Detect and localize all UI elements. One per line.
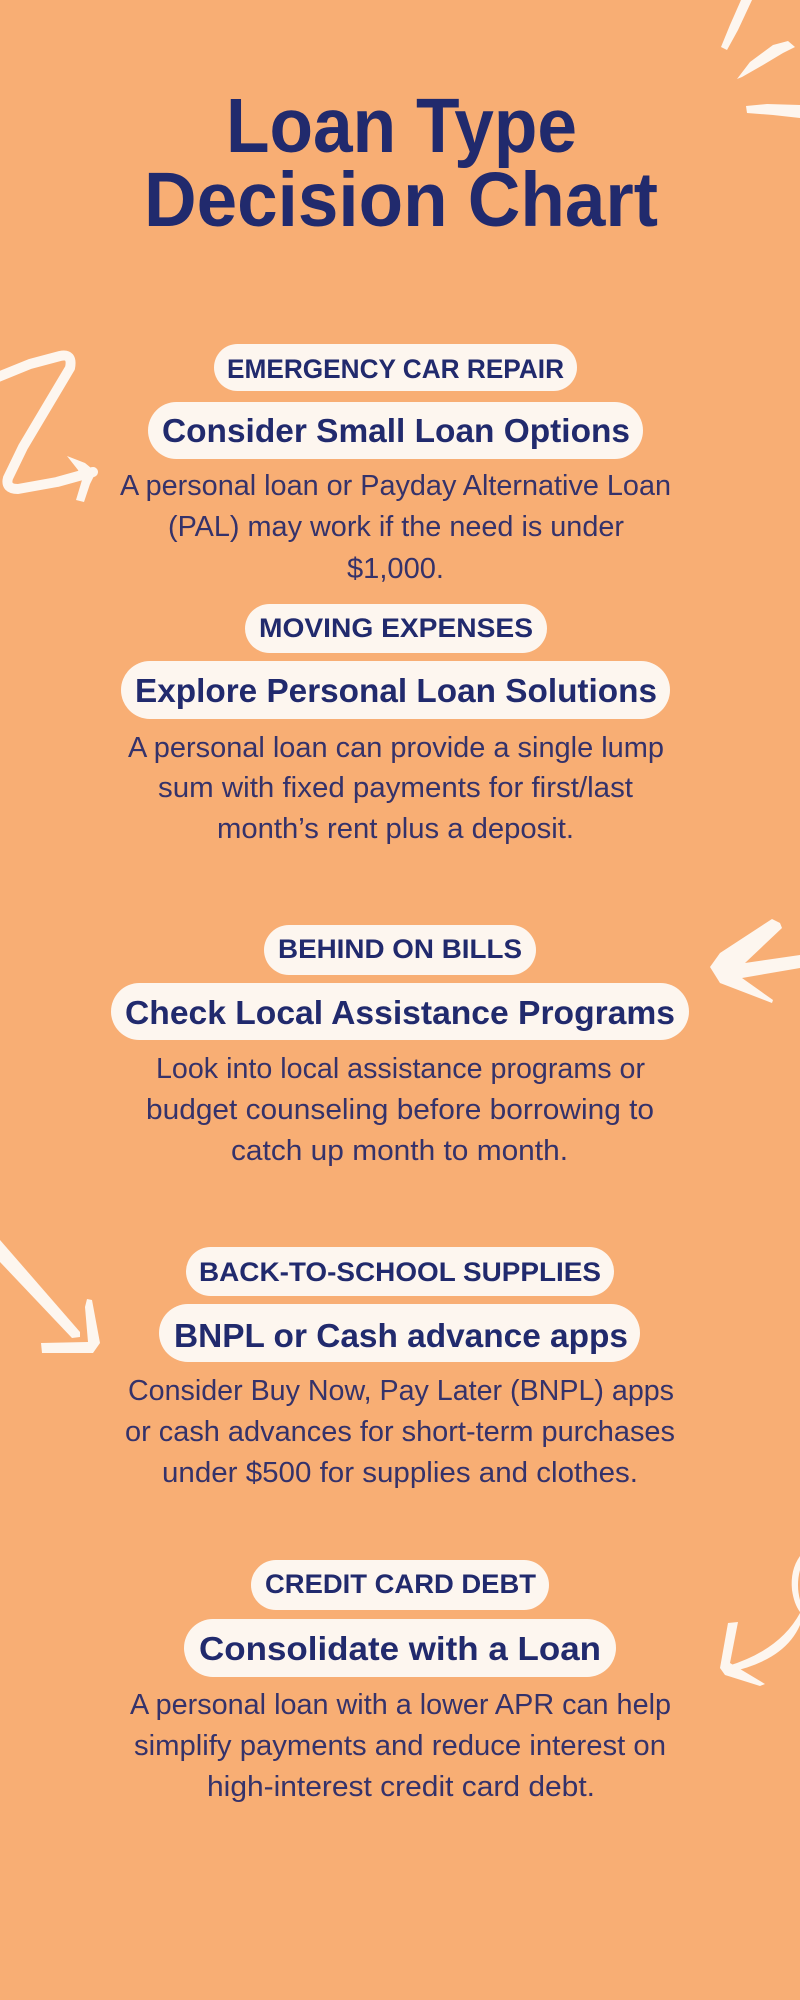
description [120, 470, 671, 585]
panel: emergency car repair [120, 344, 671, 585]
heading pill: BNPL or Cash advance apps [174, 1317, 628, 1354]
heading pill: Explore Personal Loan Solutions [135, 672, 657, 709]
description: sum with fixed payments for first/last [158, 772, 633, 804]
heading pill [148, 402, 643, 459]
description: A personal loan can provide a single lump [128, 732, 664, 764]
panel: moving expenses [121, 604, 670, 845]
heading pill: Consolidate with a Loan [199, 1630, 601, 1667]
label pill [186, 1247, 614, 1296]
heading pill [121, 661, 670, 719]
panel: back-to-school supplies [125, 1247, 675, 1489]
description: high-interest credit card debt. [207, 1771, 595, 1803]
heading pill [111, 983, 689, 1040]
description: (PAL) may work if the need is under [168, 511, 624, 543]
title: Loan Type [226, 83, 577, 169]
decorative burst strokes [721, 0, 800, 118]
title [144, 83, 658, 243]
heading pill [184, 1619, 616, 1677]
description: $1,000. [347, 553, 444, 585]
description: Look into local assistance programs or [156, 1053, 645, 1085]
description [128, 732, 664, 845]
label pill: CREDIT CARD DEBT [265, 1569, 537, 1599]
description: A personal loan with a lower APR can help [130, 1689, 671, 1721]
description: catch up month to month. [231, 1135, 568, 1167]
description: simplify payments and reduce interest on [134, 1730, 666, 1762]
arrow: zigzag right [0, 356, 96, 502]
label pill: BACK-TO-SCHOOL SUPPLIES [199, 1257, 601, 1287]
description [146, 1053, 654, 1167]
arrow: pointing left [710, 919, 800, 1003]
label pill [245, 604, 547, 653]
arrow: pointing down-right [0, 1240, 100, 1353]
description: under $500 for supplies and clothes. [162, 1457, 638, 1489]
label pill [264, 925, 536, 975]
panel: behind on bills [111, 925, 689, 1167]
label pill [214, 344, 577, 391]
description [125, 1375, 675, 1489]
arrow: curved down-left [720, 1556, 800, 1686]
description [130, 1689, 671, 1803]
description: month’s rent plus a deposit. [217, 813, 574, 845]
description: Consider Buy Now, Pay Later (BNPL) apps [128, 1375, 674, 1407]
label pill: BEHIND ON BILLS [278, 934, 522, 964]
label pill [251, 1560, 549, 1610]
heading pill: Consider Small Loan Options [162, 412, 630, 449]
heading pill [159, 1304, 640, 1362]
label pill: MOVING EXPENSES [259, 613, 533, 643]
label pill: EMERGENCY CAR REPAIR [227, 354, 564, 384]
panel: credit card debt [130, 1560, 671, 1803]
description: or cash advances for short-term purchases [125, 1416, 675, 1448]
title: Decision Chart [144, 157, 658, 243]
heading pill: Check Local Assistance Programs [125, 994, 675, 1031]
description: A personal loan or Payday Alternative Loan [120, 470, 671, 502]
description: budget counseling before borrowing to [146, 1094, 654, 1126]
